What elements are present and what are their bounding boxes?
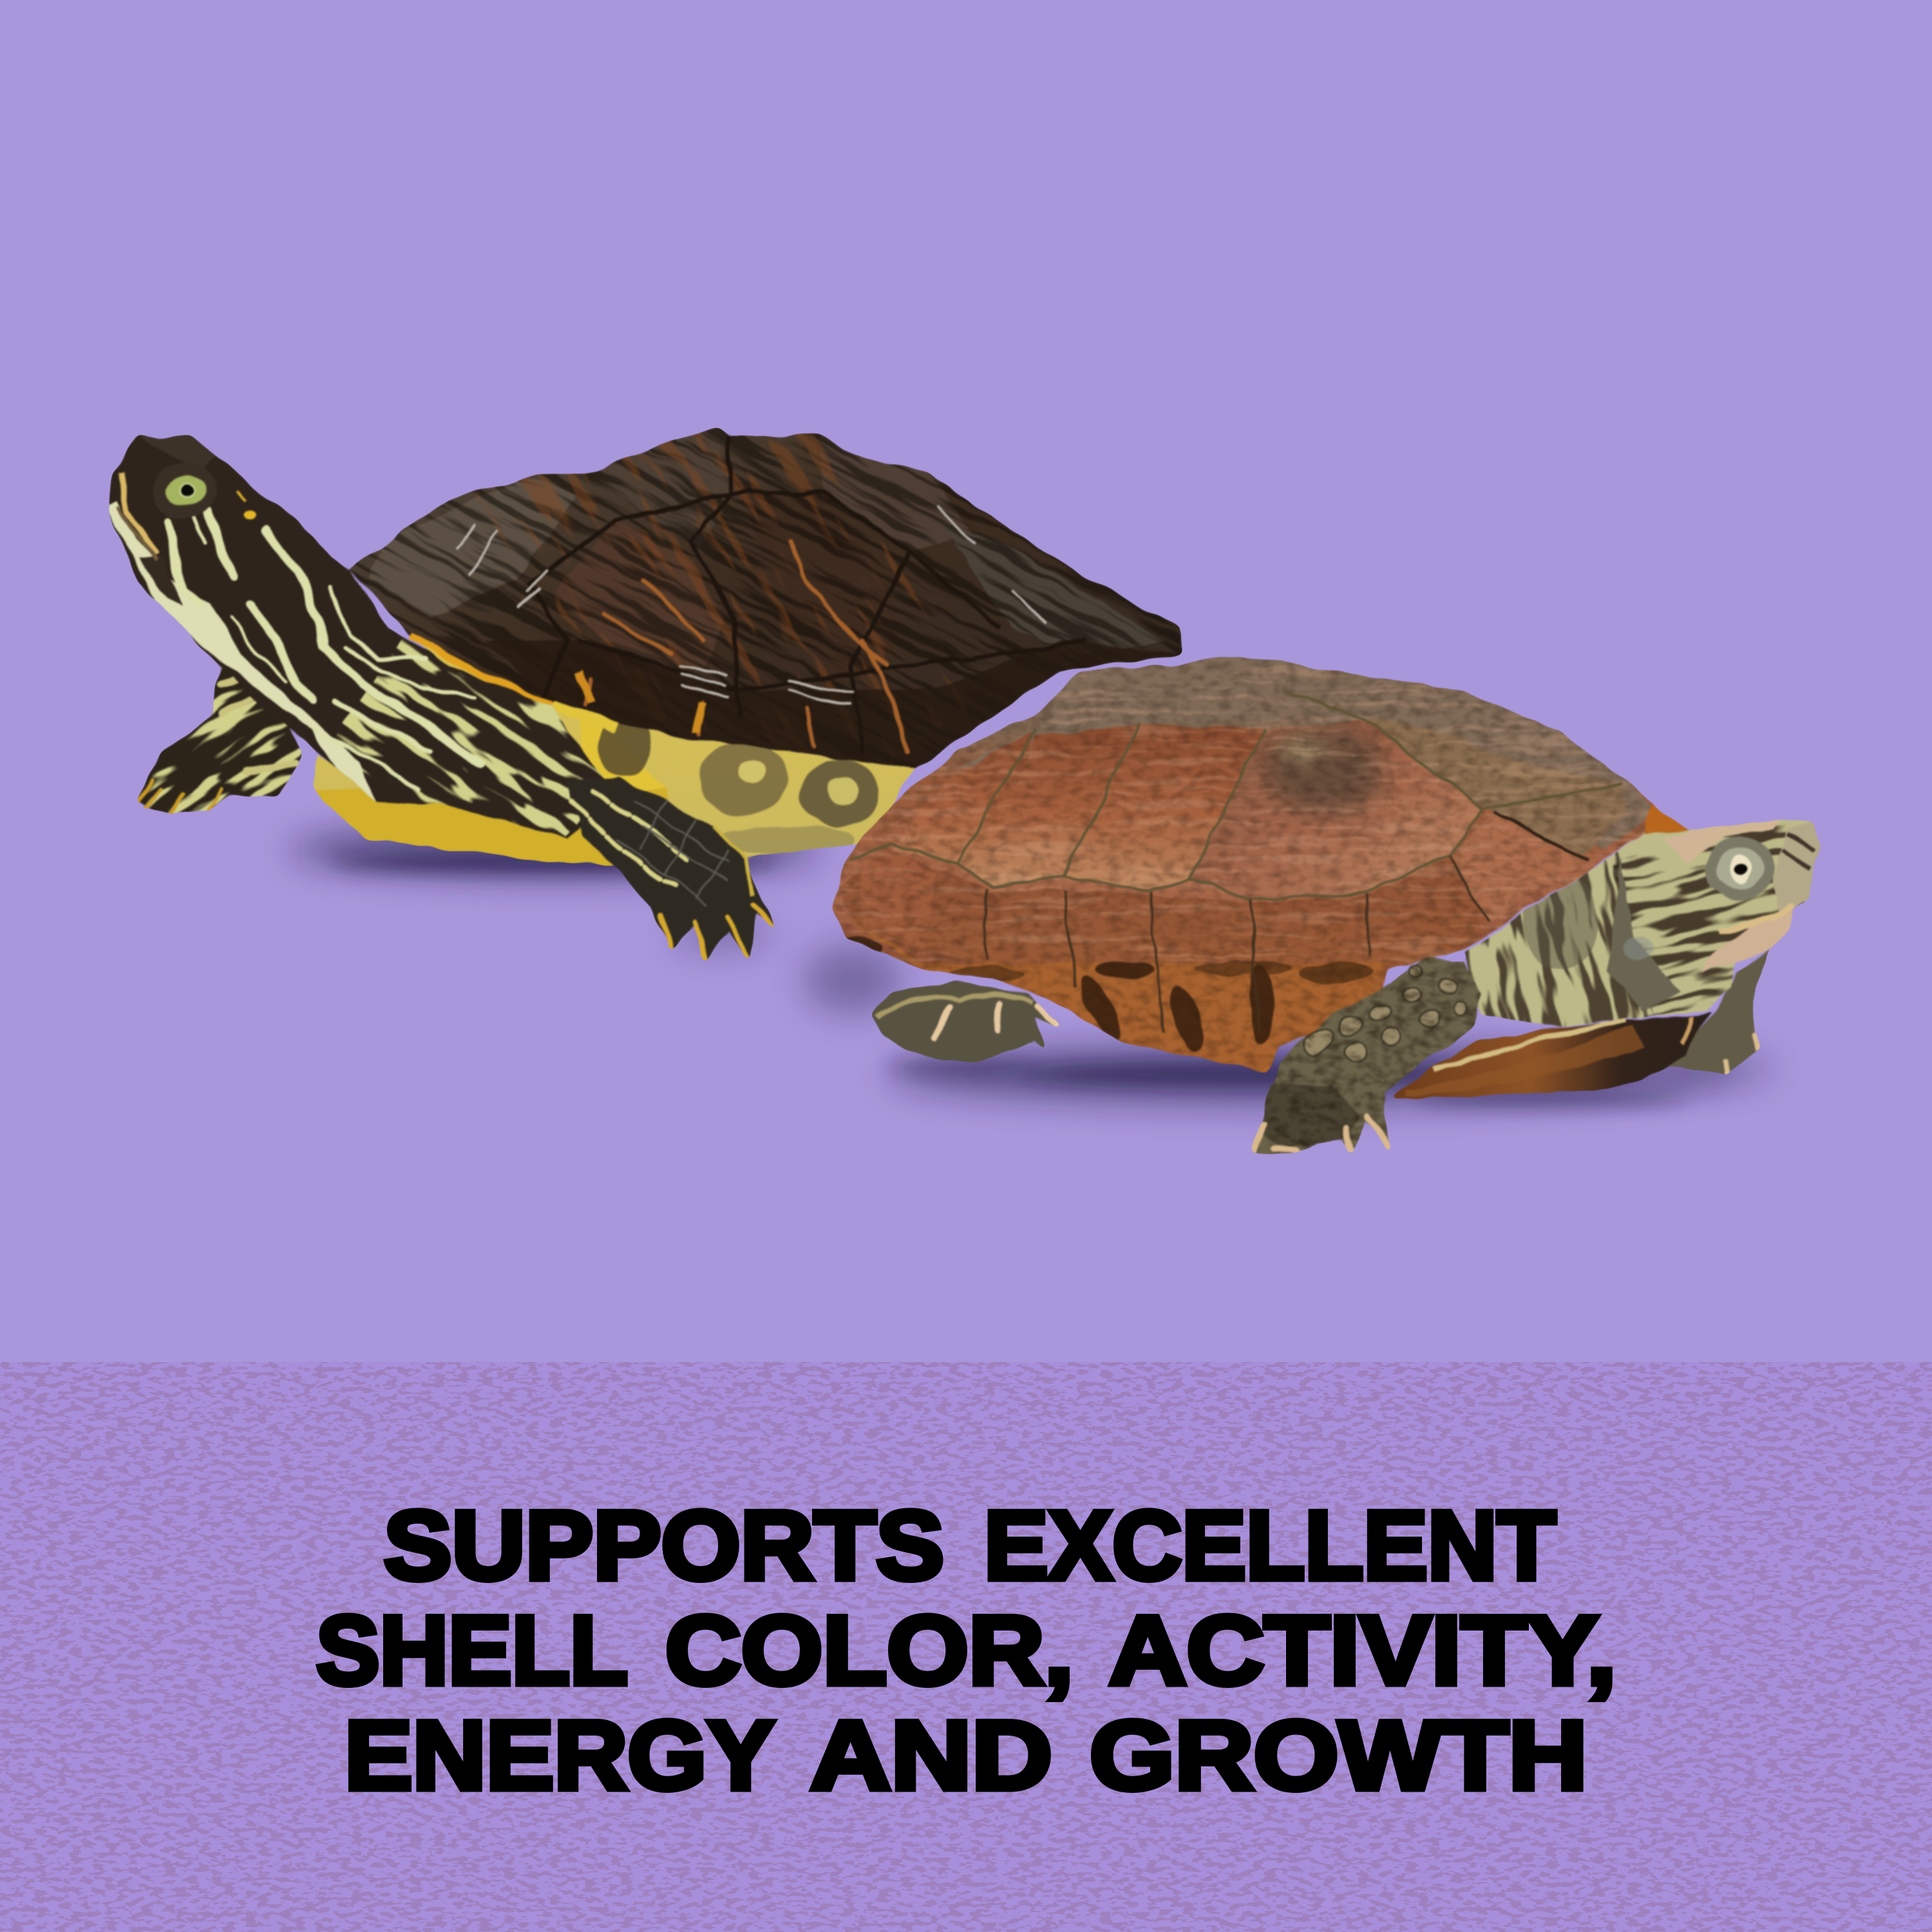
scute patches — [370, 478, 579, 616]
turtle 2: brown-shelled turtle — [818, 653, 1850, 1159]
right striated scute — [1364, 718, 1627, 857]
turtle 1 rear leg — [137, 662, 307, 814]
turtle 1 neck and head — [106, 435, 636, 887]
turtle 2 carapace — [818, 653, 1700, 1078]
turtle 1 plastron — [308, 636, 914, 875]
turtle 2 neck and head — [1388, 781, 1850, 1117]
headline line 2: ACTIVITY, — [1109, 1596, 1616, 1705]
turtle 2 eye — [1707, 835, 1773, 902]
turtle 2 rear foot — [1666, 949, 1770, 1074]
scute seams — [530, 431, 1084, 752]
turtle 2 far foot under shell — [871, 981, 1059, 1065]
dark throat blotch — [138, 557, 182, 606]
turtle 2 front leg — [1244, 949, 1491, 1159]
carapace yellow rim — [412, 636, 552, 706]
head cap — [138, 435, 216, 468]
snout and jaw — [1663, 818, 1782, 862]
growth rings — [826, 665, 1688, 961]
headline line 2 — [316, 1596, 1616, 1705]
gray neck fold — [1605, 857, 1681, 1010]
textured band — [0, 1362, 1932, 1932]
dark lower band — [487, 641, 1183, 769]
headline line 3: GROWTH — [1090, 1701, 1587, 1810]
headline line 3: ENERGY — [345, 1701, 775, 1810]
infographic canvas — [0, 428, 1932, 1932]
headline line 1: EXCELLENT — [984, 1491, 1556, 1600]
wet highlights — [456, 505, 1047, 705]
turtle 1: striped red-eared slider — [109, 428, 1182, 961]
turtle 1 eye — [153, 462, 217, 518]
turtle 1 carapace — [343, 428, 1182, 775]
orange streaks — [584, 542, 905, 752]
rust central scutes — [889, 730, 1035, 887]
ground shadows — [290, 823, 1772, 1106]
dark weathered patch — [1265, 726, 1384, 815]
headline line 2: SHELL — [316, 1596, 628, 1705]
lower row — [838, 850, 1488, 970]
headline line 1 — [384, 1491, 1556, 1600]
turtle 2 plastron — [1384, 1010, 1712, 1101]
marginal dark blotches — [818, 936, 1374, 1055]
turtle 1 front leg — [567, 776, 780, 962]
headline line 2: COLOR, — [665, 1596, 1074, 1705]
headline line 3: AND — [810, 1701, 1052, 1810]
zigzag body pattern — [328, 595, 636, 887]
headline line 1: SUPPORTS — [384, 1491, 944, 1600]
headline — [316, 1491, 1616, 1810]
shell nuchal orange tip — [1645, 803, 1689, 833]
scute seams — [850, 690, 1620, 898]
cream throat — [106, 499, 376, 801]
gray weathered top — [956, 656, 1657, 850]
headline line 3 — [345, 1701, 1587, 1810]
